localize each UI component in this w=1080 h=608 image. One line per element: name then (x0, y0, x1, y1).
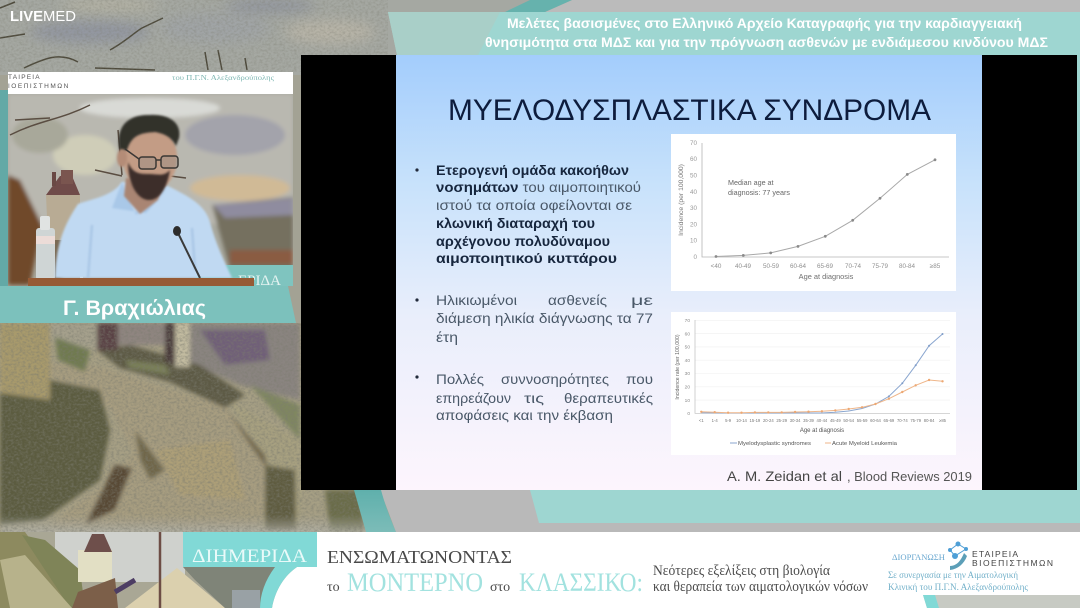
top gray strip (545, 0, 1080, 12)
header title (485, 15, 1048, 50)
teal curve (260, 567, 297, 608)
bullet 3: τις (524, 390, 544, 406)
chart: incidence by age: Incidence (per 100,000) (678, 164, 685, 236)
bullet 2: Ηλικιωμένοι (436, 292, 517, 308)
chart: MDS vs AML incidence: Acute Myeloid Leukemia (832, 441, 898, 447)
chart: MDS vs AML incidence: 50 (685, 345, 690, 351)
chart: MDS vs AML incidence: 80-84 (924, 418, 935, 423)
chart: incidence by age: ≥85 (930, 263, 941, 270)
chart: MDS vs AML incidence: Incidence rate (per 100,000) (675, 334, 681, 400)
chart: MDS vs AML incidence: 30-34 (790, 418, 801, 423)
chart: MDS vs AML incidence: Age at diagnosis (800, 428, 844, 434)
speaker video panel: ΕΡΙΔΑ (238, 273, 281, 289)
background painting: sky and road (0, 0, 570, 532)
chart: MDS vs AML incidence: Myelodysplastic syndromes (738, 441, 811, 447)
chart: MDS vs AML incidence (671, 312, 956, 455)
chart: incidence by age: 0 (693, 254, 697, 261)
speaker name banner (0, 286, 296, 323)
beard (128, 162, 170, 200)
hair (119, 115, 179, 152)
chart: incidence by age: 20 (690, 221, 697, 228)
left teal strip (0, 90, 9, 286)
event title: ΕΝΣΩΜΑΤΩΝΟΝΤΑΣ (327, 547, 512, 567)
bullet 3: θεραπευτικές (564, 390, 653, 406)
bullet 2: έτη (436, 329, 458, 345)
citation (727, 468, 972, 484)
bullet 2: ασθενείς (548, 292, 607, 308)
lower-left teal wedge (354, 490, 396, 532)
bullet 1: νοσημάτων του αιμοποιητικού (436, 179, 641, 195)
chart: incidence by age: 50-59 (763, 263, 780, 270)
event subtitle: και θεραπεία των αιματολογικών νόσων (653, 579, 868, 595)
chart: incidence by age: diagnosis: 77 years (728, 188, 790, 197)
slide (396, 55, 982, 490)
chart: MDS vs AML incidence: 35-39 (803, 418, 815, 423)
bullet 3: που (626, 371, 653, 387)
event subtitle (653, 563, 868, 595)
glasses (125, 149, 178, 169)
lower gray band (380, 490, 1080, 532)
chart: MDS vs AML incidence: 20-24 (763, 418, 774, 423)
citation: , Blood Reviews 2019 (847, 469, 972, 484)
bottom-left painting (0, 532, 300, 608)
chart: incidence by age (671, 134, 956, 291)
chart: incidence by age: 75-79 (872, 263, 889, 270)
bullet 3: συννοσηρότητες (501, 371, 609, 387)
face (124, 131, 178, 188)
ear (117, 149, 127, 167)
bullet 1: αρχέγονου πολυδύναμου (436, 233, 610, 249)
bullet 2 (415, 292, 653, 345)
logo: LIVEMED: LIVEMED (10, 9, 76, 25)
house in painting (46, 170, 80, 240)
chart: MDS vs AML incidence: 75-79 (910, 418, 922, 423)
event title: ΚΛΑΣΣΙΚΟ: (519, 568, 643, 597)
bullet 3: Πολλές (436, 371, 484, 387)
citation: A. M. Zeidan et al (727, 468, 842, 484)
chart: MDS vs AML incidence: 45-49 (830, 418, 841, 423)
top teal wedge (505, 0, 572, 12)
water bottle (36, 216, 55, 280)
chart: MDS vs AML incidence: 70-74 (897, 418, 908, 423)
lower-right teal band (530, 490, 1080, 523)
speaker name banner: Γ. Βραχιώλιας (63, 296, 206, 320)
white cut-out (272, 532, 400, 608)
organisation text: ΙΟΕΠΙΣΤΗΜΩΝ (8, 83, 70, 90)
header title: θνησιμότητα στα ΜΔΣ και για την πρόγνωση ασθενών με ενδιάμεσου κινδύνου ΜΔΣ (485, 34, 1048, 50)
bottom-right painting corner (923, 595, 1080, 608)
bullet 1: αιμοποιητικού κυττάρου (436, 250, 617, 266)
chart: MDS vs AML incidence: 60 (685, 331, 690, 337)
chart: incidence by age: 70 (690, 140, 697, 147)
chart: MDS vs AML incidence: 15-19 (750, 418, 761, 423)
header band (388, 12, 1080, 55)
bullet 3 (415, 371, 653, 423)
chart: incidence by age: 60 (690, 156, 697, 163)
event title: το (327, 580, 340, 595)
white header strip (8, 72, 293, 94)
event tag: ΔΙΗΜΕΡΙΔΑ (192, 546, 307, 567)
header title: Μελέτες βασισμένες στο Ελληνικό Αρχείο Καταγραφής για την καρδιαγγειακή (507, 15, 1022, 31)
chart: MDS vs AML incidence: 20 (685, 384, 690, 390)
event tag (183, 532, 317, 567)
chart: MDS vs AML incidence: ≥85 (939, 418, 947, 423)
speaker (55, 115, 232, 278)
chart: MDS vs AML incidence: 10 (685, 398, 690, 404)
chart: incidence by age: 40-49 (735, 263, 752, 270)
chart: MDS vs AML incidence: 60-64 (870, 418, 882, 423)
chart: MDS vs AML incidence: 0 (687, 411, 690, 417)
chart: incidence by age: 40 (690, 189, 697, 196)
chart: incidence by age: 50 (690, 173, 697, 180)
chart: incidence by age: 80-84 (899, 263, 916, 270)
chart: MDS vs AML incidence: 40 (685, 358, 690, 364)
chart: incidence by age: 60-64 (790, 263, 807, 270)
bullet 2: διάμεση ηλικία διάγνωσης τα 77 (436, 310, 653, 326)
neck (124, 178, 165, 214)
organiser block: ΒΙΟΕΠΙΣΤΗΜΩΝ (972, 558, 1053, 568)
bullet 1: ιστού τα οποία οφείλονται σε (436, 197, 632, 213)
bullet 2: με (631, 292, 653, 308)
organiser block: ΕΤΑΙΡΕΙΑ (972, 549, 1018, 559)
event title: στο (490, 580, 510, 595)
organiser block: Κλινική του Π.Γ.Ν. Αλεξανδρούπολης (888, 582, 1028, 592)
video backdrop painting (8, 94, 293, 285)
organiser block: Σε συνεργασία με την Αιματολογική (888, 570, 1018, 580)
bullet 1: Ετερογενή ομάδα κακοήθων (436, 162, 629, 178)
chart: MDS vs AML incidence: 25-29 (776, 418, 788, 423)
chart: incidence by age: Median age at (728, 178, 774, 187)
bullet 1 (415, 162, 641, 266)
chart: MDS vs AML incidence: 55-59 (857, 418, 868, 423)
slide title: ΜΥΕΛΟΔΥΣΠΛΑΣΤΙΚΑ ΣΥΝΔΡΟΜΑ (448, 94, 931, 127)
bullet 3: επηρεάζουν (436, 390, 511, 406)
bottom banner (0, 532, 1080, 608)
chart: MDS vs AML incidence: 5-9 (725, 418, 732, 423)
chart: MDS vs AML incidence: 50-54 (843, 418, 855, 423)
chart: MDS vs AML incidence: 10-14 (736, 418, 748, 423)
lectern (28, 278, 254, 286)
shirt (55, 182, 232, 278)
teal banner behind speaker (195, 265, 293, 286)
organisation text: του Π.Γ.Ν. Αλεξανδρούπολης (172, 73, 274, 82)
microphone (173, 226, 200, 278)
chart: incidence by age: 65-69 (817, 263, 834, 270)
chart: incidence by age: 10 (690, 238, 697, 244)
chart: MDS vs AML incidence: 30 (685, 371, 690, 377)
chart: MDS vs AML incidence: 70 (685, 318, 690, 324)
bullet 1: κλωνική διαταραχή του (436, 215, 595, 231)
bullet 3: αποφάσεις και την έκβαση (436, 407, 613, 423)
chart: incidence by age: Age at diagnosis (799, 272, 854, 281)
slide black frame (301, 55, 1077, 490)
chart: incidence by age: <40 (711, 263, 722, 270)
event title (327, 547, 643, 597)
chart: MDS vs AML incidence: 1-4 (712, 418, 718, 423)
chart: incidence by age: 30 (690, 205, 697, 212)
event title: ΜΟΝΤΕΡΝΟ (347, 568, 483, 597)
organisation text (8, 74, 274, 88)
organiser block (888, 542, 1053, 592)
event subtitle: Νεότερες εξελίξεις στη βιολογία (653, 563, 830, 579)
organiser block: ΔΙΟΡΓΑΝΩΣΗ (892, 553, 945, 562)
organisation text: ΤΑΙΡΕΙΑ (8, 74, 41, 81)
chart: MDS vs AML incidence: <1 (699, 418, 704, 423)
speaker video panel (8, 72, 293, 289)
chart: incidence by age: 70-74 (845, 263, 862, 270)
chart: MDS vs AML incidence: 65-69 (884, 418, 895, 423)
water glass (80, 277, 83, 278)
icon: DNA molecule (948, 542, 968, 570)
chart: MDS vs AML incidence: 40-44 (817, 418, 828, 423)
